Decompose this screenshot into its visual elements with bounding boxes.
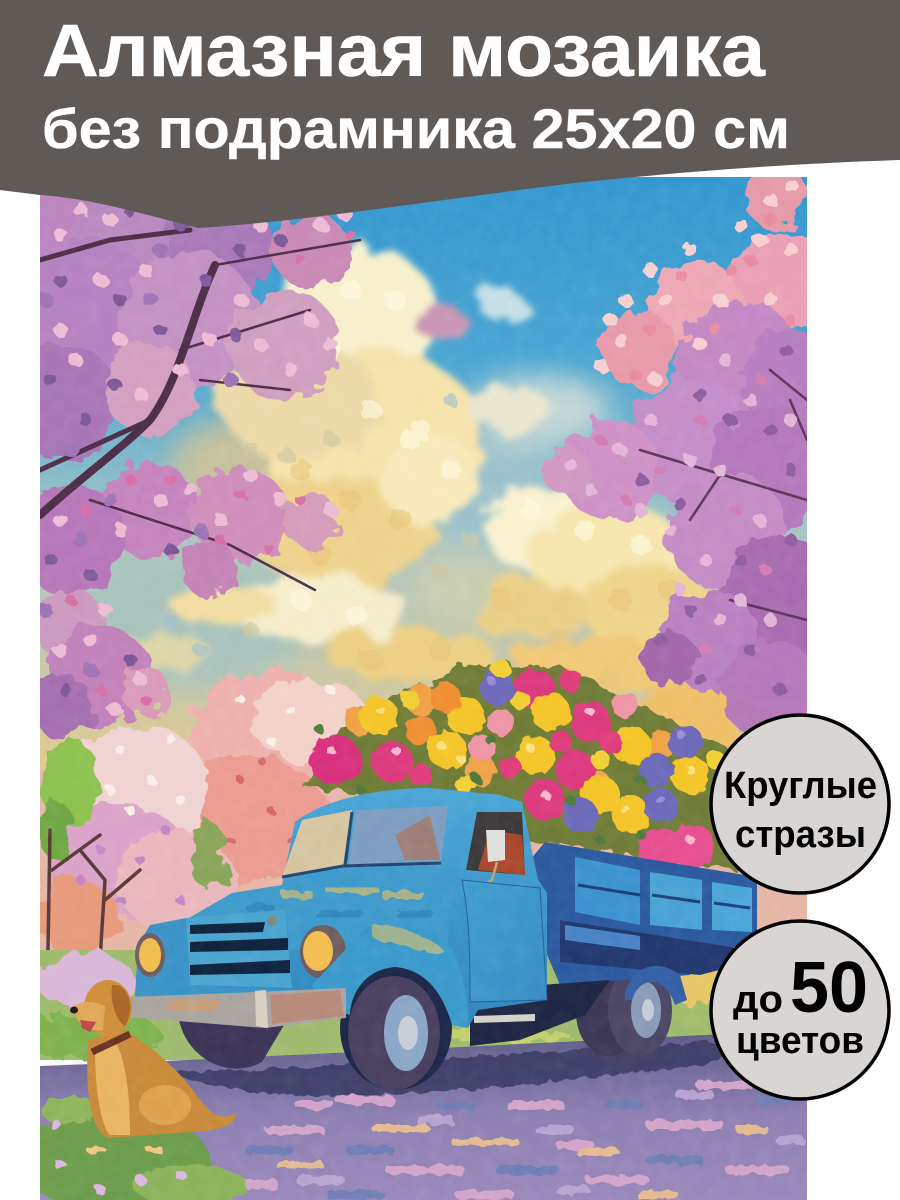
sky <box>40 177 807 777</box>
truck: chassis <box>470 980 610 1046</box>
truck: running board <box>474 1014 535 1023</box>
truck: hood rust dabs <box>250 890 430 915</box>
title line 2: без подрамника 25х20 см <box>42 97 790 160</box>
truck: windshield <box>282 806 448 877</box>
truck: front fender <box>312 939 468 1028</box>
tree: left blossoms <box>40 195 352 740</box>
right tree petals and branches <box>570 185 807 690</box>
truck: cargo bed <box>530 842 757 1005</box>
lower backdrop behind truck <box>40 770 807 960</box>
flower load <box>305 665 735 870</box>
truck: grille <box>186 910 292 988</box>
header banner <box>0 0 900 228</box>
tree: right blossoms <box>542 177 807 732</box>
truck: front wheel <box>348 976 440 1090</box>
truck: body shell <box>135 788 547 1028</box>
title line 1: Алмазная мозаика <box>42 9 766 92</box>
truck: fender highlight <box>372 925 445 952</box>
cloud brush dabs <box>170 290 671 680</box>
dog <box>70 980 236 1138</box>
dog: collar <box>92 1034 130 1052</box>
badge: up to 50 colours: цветов <box>736 1020 864 1062</box>
dog: chest highlight <box>95 1040 130 1135</box>
truck: door <box>462 880 547 1002</box>
truck: far front wheel <box>179 1021 284 1069</box>
badge: round rhinestones <box>711 715 889 893</box>
truck: door window and mirror <box>466 812 525 890</box>
left tree petals and branches <box>40 210 360 710</box>
dog: head <box>70 980 132 1036</box>
dog: haunch highlight <box>139 1085 191 1125</box>
dog: body <box>87 1030 236 1138</box>
badge: round rhinestones: стразы <box>735 814 866 856</box>
ground: grass and road <box>10 950 807 1200</box>
truck <box>128 788 757 1090</box>
truck: front body <box>135 918 254 997</box>
badge: up to 50 colours: 50 <box>790 948 868 1028</box>
badge: up to 50 colours: до <box>733 979 783 1021</box>
truck: front wheel arch <box>340 966 452 1090</box>
badge: round rhinestones: Круглые <box>724 765 877 807</box>
truck: rear wheels <box>576 980 672 1056</box>
background trees <box>37 670 370 960</box>
truck: headlights <box>135 925 346 979</box>
badge: up to 50 colours <box>711 921 889 1099</box>
paint grain overlay <box>54 204 720 1065</box>
truck: hood <box>216 890 448 950</box>
truck: bumper <box>128 988 346 1028</box>
clouds <box>70 245 750 760</box>
